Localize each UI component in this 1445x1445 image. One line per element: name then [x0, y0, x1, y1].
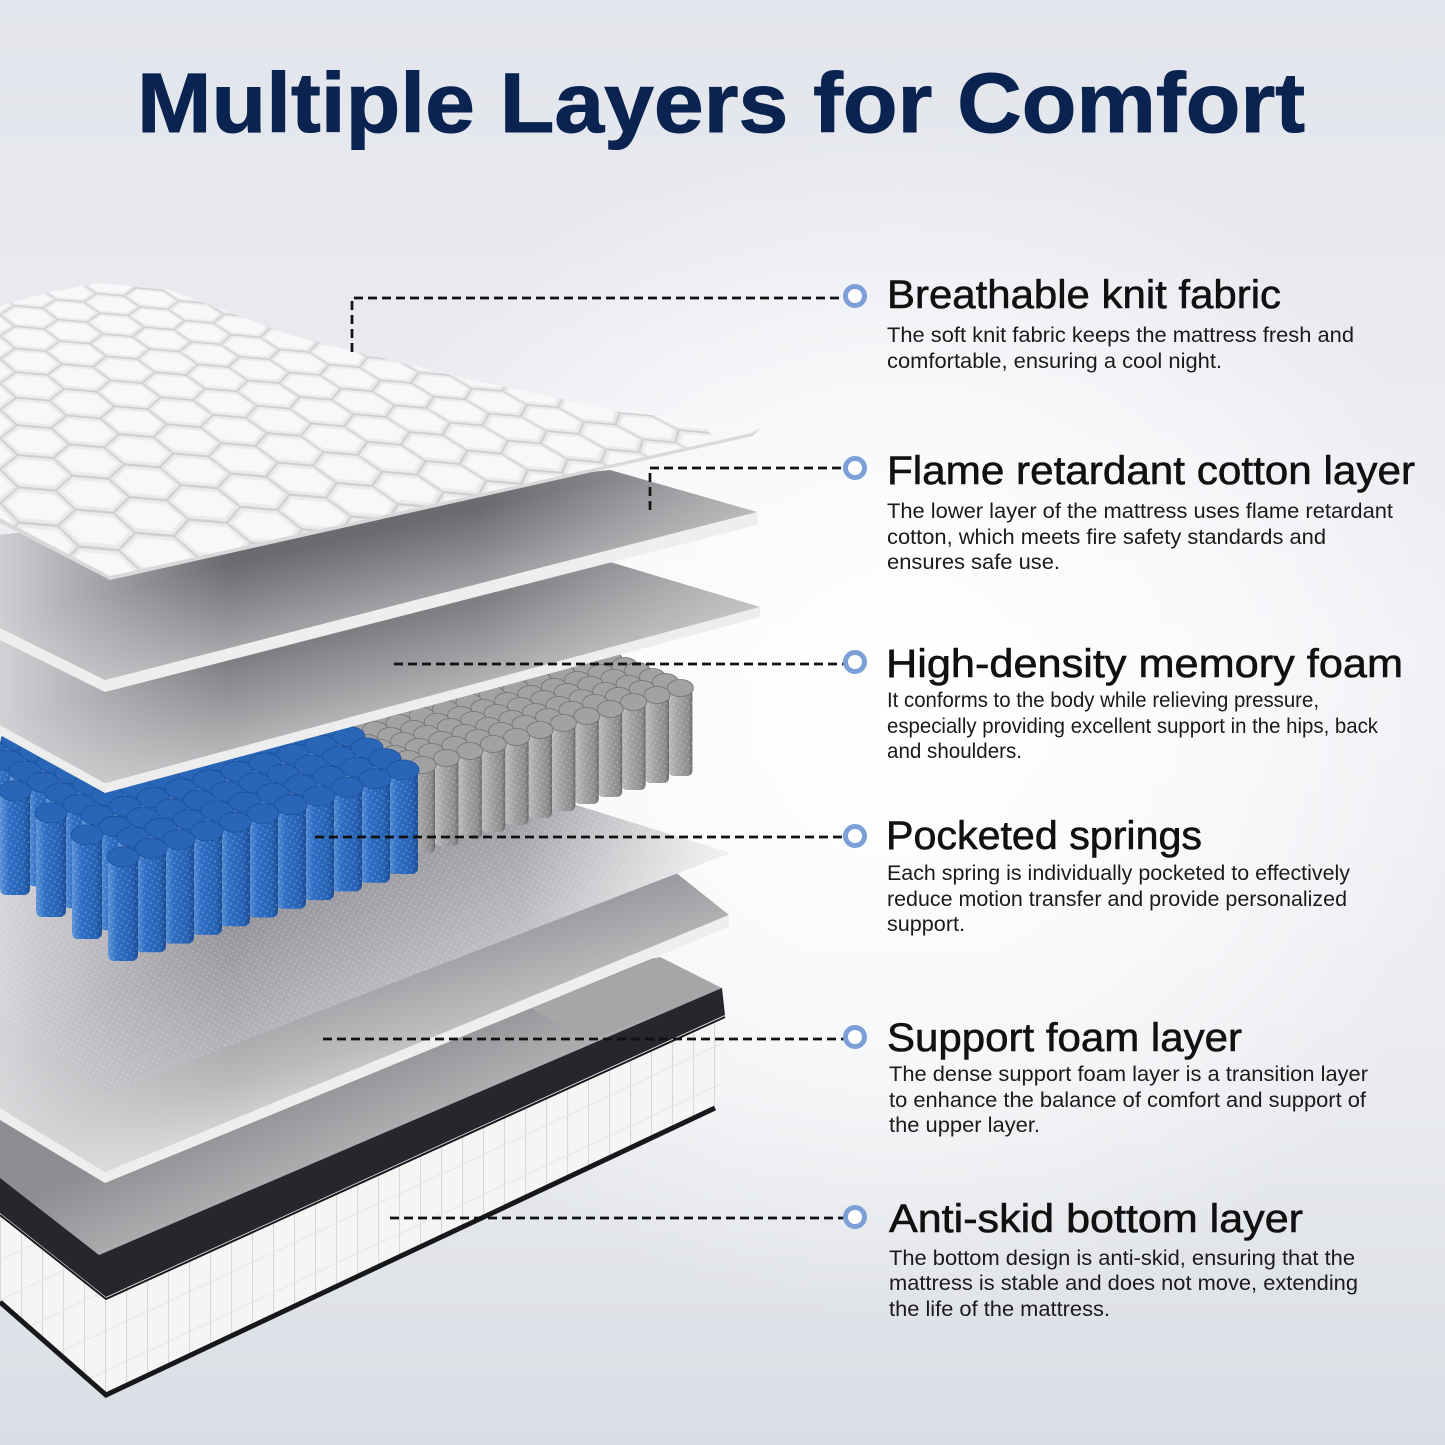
- description: comfortable, ensuring a cool night.: [887, 349, 1222, 373]
- description: especially providing excellent support in the hips, back: [887, 714, 1378, 738]
- description: to enhance the balance of comfort and support of: [889, 1088, 1366, 1112]
- flame retardant cotton layer: [0, 470, 757, 692]
- marker: [846, 1208, 864, 1226]
- callout: breathable knit fabric: [352, 273, 1354, 373]
- mattress base: [0, 957, 725, 1395]
- description: The soft knit fabric keeps the mattress fresh and: [887, 323, 1354, 347]
- description: support.: [887, 912, 965, 936]
- marker: [846, 826, 864, 846]
- description: and shoulders.: [887, 739, 1022, 763]
- marker: [846, 652, 864, 672]
- marker: [846, 1028, 864, 1046]
- mattress illustration: [0, 428, 760, 1395]
- leader line: [323, 1038, 845, 1040]
- callout: support foam layer: [323, 1016, 1368, 1137]
- description: [887, 688, 1378, 763]
- callout: pocketed springs: [315, 814, 1350, 936]
- leader line: [394, 663, 845, 665]
- support foam layer: [0, 860, 729, 1183]
- callout: high-density memory foam: [394, 642, 1403, 763]
- description: [889, 1246, 1358, 1321]
- description: [889, 1062, 1368, 1137]
- mesh layer: [0, 800, 730, 1092]
- leader line: [315, 836, 845, 838]
- breathable knit fabric layer: [0, 283, 760, 576]
- marker: [846, 286, 864, 306]
- pocketed springs: [0, 640, 693, 961]
- leader line: [650, 468, 845, 510]
- description: The lower layer of the mattress uses flame retardant: [887, 499, 1393, 523]
- blue springs: [0, 661, 419, 961]
- description: It conforms to the body while relieving pressure,: [887, 688, 1319, 712]
- title: Multiple Layers for Comfort: [137, 56, 1305, 150]
- description: reduce motion transfer and provide personalized: [887, 887, 1347, 911]
- heading: Support foam layer: [887, 1016, 1242, 1060]
- leader line: [390, 1217, 845, 1219]
- heading: Breathable knit fabric: [887, 273, 1281, 317]
- description: [887, 861, 1350, 936]
- high-density memory foam layer: [0, 562, 760, 793]
- description: cotton, which meets fire safety standards and: [887, 525, 1326, 549]
- knit layer rim: [0, 428, 760, 580]
- description: The dense support foam layer is a transition layer: [889, 1062, 1368, 1086]
- heading: Flame retardant cotton layer: [887, 449, 1415, 493]
- heading: Pocketed springs: [886, 814, 1202, 858]
- heading: Anti-skid bottom layer: [889, 1197, 1303, 1241]
- description: [887, 323, 1354, 373]
- callout: flame retardant cotton layer: [650, 449, 1415, 574]
- description: the life of the mattress.: [889, 1297, 1110, 1321]
- description: Each spring is individually pocketed to effectively: [887, 861, 1350, 885]
- description: ensures safe use.: [887, 550, 1060, 574]
- marker: [846, 458, 864, 478]
- callout: anti-skid bottom layer: [390, 1197, 1358, 1321]
- grey springs: [311, 640, 693, 853]
- heading: High-density memory foam: [886, 642, 1403, 686]
- leader line: [352, 298, 845, 352]
- description: mattress is stable and does not move, extending: [889, 1271, 1358, 1295]
- description: the upper layer.: [889, 1113, 1040, 1137]
- description: The bottom design is anti-skid, ensuring that the: [889, 1246, 1355, 1270]
- description: [887, 499, 1393, 574]
